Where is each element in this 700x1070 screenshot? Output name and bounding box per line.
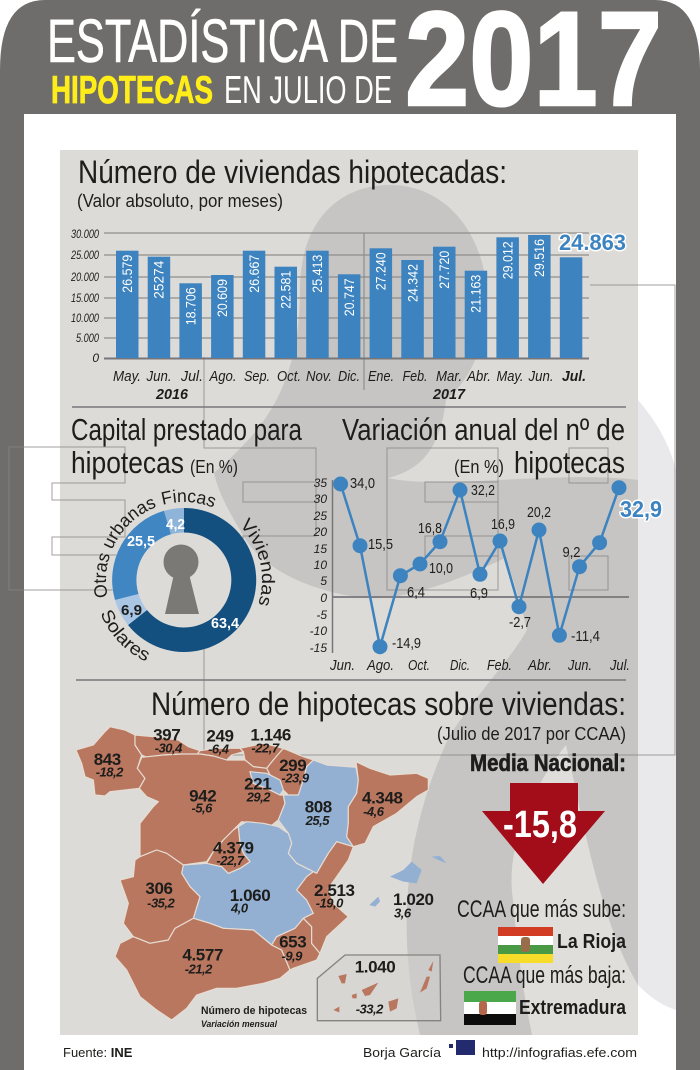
line chart: 10	[314, 558, 327, 572]
bar chart: 2016	[155, 386, 189, 403]
map labels: -33,2	[356, 1001, 384, 1016]
map labels: 1.060	[230, 886, 270, 905]
heading: capital prestado	[71, 412, 303, 480]
map labels: 2.513	[314, 881, 355, 900]
bar chart: 0	[92, 351, 99, 365]
map labels: 653	[279, 932, 306, 951]
line chart: 32,2	[471, 482, 495, 499]
line chart: Jul.	[609, 657, 630, 674]
heading: número de hipotecas	[151, 686, 626, 744]
footer author: Borja García	[363, 1045, 442, 1060]
segment: otras urbanas	[112, 511, 171, 600]
bar chart: 25.000	[70, 248, 99, 262]
bar chart: May.	[113, 368, 141, 385]
bar chart: Jun.	[528, 368, 554, 385]
heading: número de hipotecas: (Julio de 2017 por CCAA)	[437, 724, 626, 744]
icon: flag La Rioja	[498, 927, 553, 963]
donut chart: 4,2	[166, 516, 185, 533]
header title	[47, 0, 662, 134]
bar chart: Jul.	[562, 368, 586, 385]
line chart: Jun.	[567, 657, 592, 674]
bar chart: 20.000	[70, 270, 99, 284]
bar chart: 10.000	[71, 311, 99, 325]
bar chart: 21.163	[468, 275, 484, 313]
map labels: -18,2	[96, 765, 124, 780]
line chart: -14,9	[392, 635, 421, 652]
bar chart: Jul.	[180, 368, 203, 385]
donut chart: Solares	[102, 610, 149, 660]
bar chart: May.	[496, 368, 524, 385]
donut chart: Fincas	[162, 490, 216, 507]
heading: número de hipotecas: Número de hipotecas sobre viviendas:	[151, 686, 626, 722]
map labels: 1.040	[355, 958, 395, 977]
line chart: 30	[314, 492, 327, 506]
arrow: media nacional: -15,8	[503, 804, 577, 846]
heading: variación anual: (En %)	[454, 457, 504, 477]
bar chart: Jun.	[146, 368, 172, 385]
arrow: media nacional	[482, 783, 605, 884]
line chart: Jun.	[329, 657, 355, 674]
icon: keyhole	[164, 544, 199, 614]
bar chart: 24.342	[404, 264, 420, 302]
line chart: 15,5	[368, 536, 393, 553]
text: CCAA que más sube: CCAA que más sube:	[457, 896, 626, 923]
line chart: 10,0	[429, 560, 453, 577]
bar chart: Nov.	[306, 368, 332, 385]
map labels: 1.020	[393, 890, 434, 909]
map labels: -4,6	[363, 804, 385, 819]
bar chart: 29.516	[531, 239, 547, 277]
heading: capital prestado: (En %)	[190, 457, 238, 477]
map labels: 942	[189, 787, 216, 806]
footer source: Fuente: INE	[63, 1045, 133, 1060]
bar chart: 22.581	[278, 271, 294, 309]
line chart: 5	[320, 574, 327, 588]
map legend: Variación mensual	[201, 1019, 277, 1029]
map labels: 397	[153, 726, 180, 745]
map labels: -9,9	[281, 949, 303, 964]
footer url: http://infografias.efe.com	[482, 1045, 637, 1060]
header title: ESTADÍSTICA DE	[47, 7, 398, 75]
line chart: Ago.	[366, 657, 394, 674]
line chart: Feb.	[487, 657, 512, 674]
map labels: -35,2	[147, 895, 176, 910]
segment: viviendas	[128, 508, 256, 652]
bar chart: 30.000	[71, 227, 99, 241]
map legend	[201, 1005, 307, 1029]
line chart: -2,7	[509, 614, 531, 631]
map labels: 808	[305, 798, 332, 817]
bar chart: Oct.	[277, 368, 301, 385]
map labels: 221	[244, 774, 271, 793]
bar chart: 26.579	[119, 255, 135, 293]
media nacional heading: Media Nacional:	[470, 750, 626, 777]
bar chart: Ene.	[368, 368, 394, 385]
map labels: 306	[145, 879, 173, 898]
donut chart: Otras urbanas	[94, 499, 156, 598]
line chart: -5	[316, 608, 327, 622]
line chart: 32,9	[620, 496, 662, 522]
map labels: 4.577	[182, 946, 223, 965]
map legend: Número de hipotecas	[201, 1005, 307, 1017]
bar chart: 27.240	[373, 252, 389, 290]
donut chart: Viviendas	[243, 517, 276, 606]
heading: variación anual	[342, 412, 625, 480]
text: CCAA que más baja: CCAA que más baja:	[463, 962, 626, 989]
line chart: -11,4	[571, 628, 600, 645]
heading: número de viviendas hipotecadas	[77, 154, 507, 211]
map labels: -30,4	[155, 741, 183, 756]
line chart: 0	[320, 591, 327, 605]
heading: número de viviendas hipotecadas: (Valor absoluto, por meses)	[77, 191, 283, 211]
bar chart: 24.863	[559, 230, 626, 255]
line chart: 6,4	[407, 584, 425, 601]
map labels: -5,6	[191, 800, 213, 815]
line chart: -10	[310, 624, 327, 638]
line chart: -15	[310, 641, 327, 655]
line chart: Abr.	[527, 657, 552, 674]
bar chart: 18.706	[182, 287, 198, 325]
map labels: 4.379	[213, 838, 254, 857]
map labels: -23,9	[281, 771, 310, 786]
line chart: 20	[313, 525, 327, 539]
heading: capital prestado: hipotecas	[71, 445, 184, 480]
text: Extremadura: Extremadura	[519, 997, 627, 1019]
bar chart: 26.667	[246, 255, 262, 293]
bar chart: 5.000	[76, 331, 99, 345]
line chart: 16,8	[418, 520, 442, 537]
line chart: 25	[313, 509, 327, 523]
bar chart: 20.609	[214, 279, 230, 317]
map labels: -19,0	[316, 895, 344, 910]
bar chart: Dic.	[338, 368, 360, 385]
map labels: -6,4	[208, 741, 230, 756]
donut chart: 63,4	[211, 615, 240, 632]
inset: Canarias	[317, 955, 441, 1021]
donut chart	[94, 490, 276, 660]
line chart: 9,2	[562, 544, 580, 561]
map labels: -21,2	[185, 961, 213, 976]
donut chart: 6,9	[121, 602, 142, 619]
bar chart: 25.413	[309, 255, 325, 293]
icon: EFE logo	[449, 1040, 475, 1055]
bar chart: 2017	[432, 386, 466, 403]
map labels: 299	[279, 756, 306, 775]
panel: gray background with swirl	[60, 150, 638, 1035]
segment: solares	[115, 594, 147, 625]
heading: capital prestado: Capital prestado para	[71, 412, 303, 447]
line chart: 20,2	[527, 504, 551, 521]
heading: número de viviendas hipotecadas: Número de viviendas hipotecadas:	[78, 154, 507, 190]
line chart: 16,9	[491, 516, 515, 533]
bar chart: 15.000	[71, 291, 99, 305]
header title: HIPOTECAS	[51, 69, 213, 112]
map labels: 1.146	[250, 726, 291, 745]
line chart: 35	[314, 476, 327, 490]
heading: variación anual: hipotecas	[514, 445, 625, 480]
map labels: 3,6	[394, 905, 412, 920]
bar chart: 27.720	[436, 251, 452, 289]
segment: fincas	[164, 508, 184, 534]
line chart: 34,0	[350, 475, 375, 492]
bar chart: Ago.	[209, 368, 236, 385]
bar chart: Mar.	[436, 368, 462, 385]
frame line artefacts	[9, 285, 675, 755]
icon: flag Extremadura	[464, 991, 516, 1025]
bar chart: Feb.	[402, 368, 428, 385]
map labels: 843	[94, 750, 121, 769]
map labels: -22,7	[251, 741, 280, 756]
bar chart: Sep.	[244, 368, 270, 385]
line chart: Oct.	[408, 657, 430, 674]
map labels: 4.348	[362, 788, 403, 807]
bar chart: Abr.	[466, 368, 491, 385]
map labels: 4,0	[230, 900, 249, 915]
line chart: Dic.	[450, 657, 470, 674]
bar chart: 25274	[151, 260, 167, 299]
map labels: 29,2	[246, 790, 271, 805]
text: La Rioja: La Rioja	[557, 931, 627, 953]
heading: variación anual: Variación anual del nº de	[342, 412, 625, 447]
bar chart	[70, 227, 626, 403]
header title: EN JULIO DE	[224, 69, 392, 112]
line chart: 15	[314, 542, 327, 556]
line chart: 6,9	[470, 585, 488, 602]
map of Spain	[76, 727, 447, 1020]
donut chart: 25,5	[127, 533, 155, 550]
line chart	[310, 475, 662, 674]
bar chart: 20.747	[341, 278, 357, 316]
map labels: -22,7	[216, 853, 245, 868]
map labels: 249	[206, 726, 234, 745]
map labels	[94, 726, 434, 1016]
bar chart: 29.012	[499, 241, 515, 279]
map labels: 25,5	[305, 813, 330, 828]
